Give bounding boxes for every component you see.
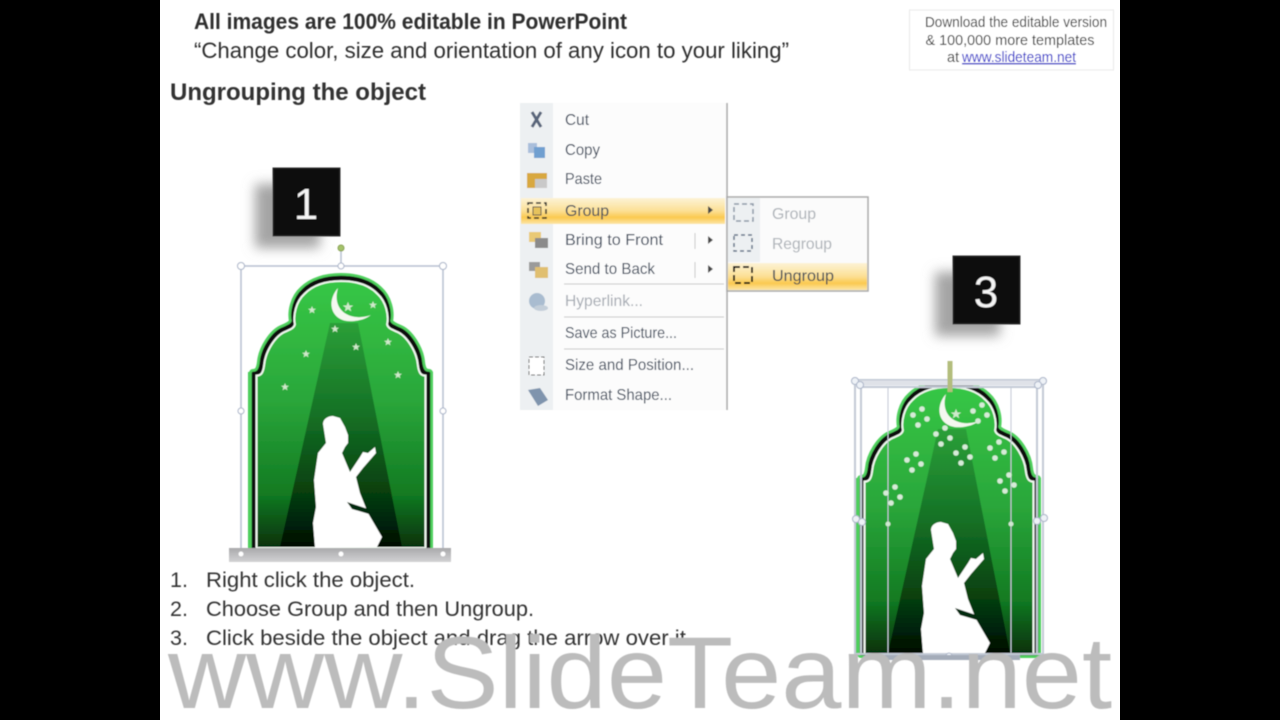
frame handles xyxy=(852,378,1048,659)
ungroup highlight xyxy=(728,263,867,290)
menu labels xyxy=(565,112,694,404)
download callout xyxy=(910,10,1114,70)
header line two: “Change color, size and orientation of any icon to your liking” xyxy=(194,38,789,63)
submenu labels: Group xyxy=(772,206,816,223)
base strip xyxy=(880,655,1020,660)
step three: 3. xyxy=(170,626,188,650)
instruction list xyxy=(170,568,692,650)
menu labels: Hyperlink... xyxy=(565,293,643,310)
menu labels: Paste xyxy=(565,171,602,188)
menu labels: Format Shape... xyxy=(565,387,672,404)
download callout: Download the editable version xyxy=(925,15,1107,31)
submenu arrows xyxy=(708,206,713,273)
menu labels: Size and Position... xyxy=(565,357,694,374)
context menu xyxy=(520,103,727,410)
arch artwork with praying figure xyxy=(856,383,1041,654)
download callout: & 100,000 more templates xyxy=(926,33,1094,49)
step 3 number badge: 3 xyxy=(974,268,998,317)
step 1 number badge: 1 xyxy=(294,180,318,229)
step three: Click beside the object and drag the arrow over it. xyxy=(206,626,692,650)
step 1 selected mosque arch xyxy=(229,245,451,562)
step 3 ungrouped mosque arch xyxy=(852,361,1048,660)
slide content xyxy=(167,9,1114,720)
white slide panel xyxy=(160,0,1120,720)
step 1 number badge xyxy=(255,168,340,248)
menu labels: Group xyxy=(565,203,609,220)
group submenu: Regroup xyxy=(772,236,832,253)
menu labels: Bring to Front xyxy=(565,232,664,249)
selection handles xyxy=(238,245,446,556)
step two: Choose Group and then Ungroup. xyxy=(206,597,534,621)
step 3 number badge xyxy=(935,256,1020,336)
header text xyxy=(194,9,789,63)
star selection dots xyxy=(883,402,1017,506)
header line one: All images are 100% editable in PowerPoint xyxy=(194,9,628,34)
heading: Ungrouping the object xyxy=(170,79,426,106)
menu labels: Send to Back xyxy=(565,261,656,278)
submenu icons xyxy=(734,204,753,283)
arch artwork with praying figure xyxy=(248,277,433,548)
stars xyxy=(281,301,402,390)
download callout: www.slideteam.net xyxy=(961,50,1076,66)
step one: 1. xyxy=(170,568,188,592)
menu labels: Save as Picture... xyxy=(565,325,677,342)
moon star xyxy=(951,409,961,418)
group submenu xyxy=(727,197,868,291)
menu labels: Copy xyxy=(565,142,600,159)
menu labels: Cut xyxy=(565,112,590,129)
menu icons xyxy=(527,112,548,406)
step two: 2. xyxy=(170,597,188,621)
base bar xyxy=(229,548,451,562)
group highlight xyxy=(521,198,725,224)
ungrouped selection frames xyxy=(855,361,1043,654)
group submenu: Ungroup xyxy=(772,268,834,285)
selection frame xyxy=(241,248,443,550)
download callout: at xyxy=(947,50,959,66)
step one: Right click the object. xyxy=(206,568,415,592)
